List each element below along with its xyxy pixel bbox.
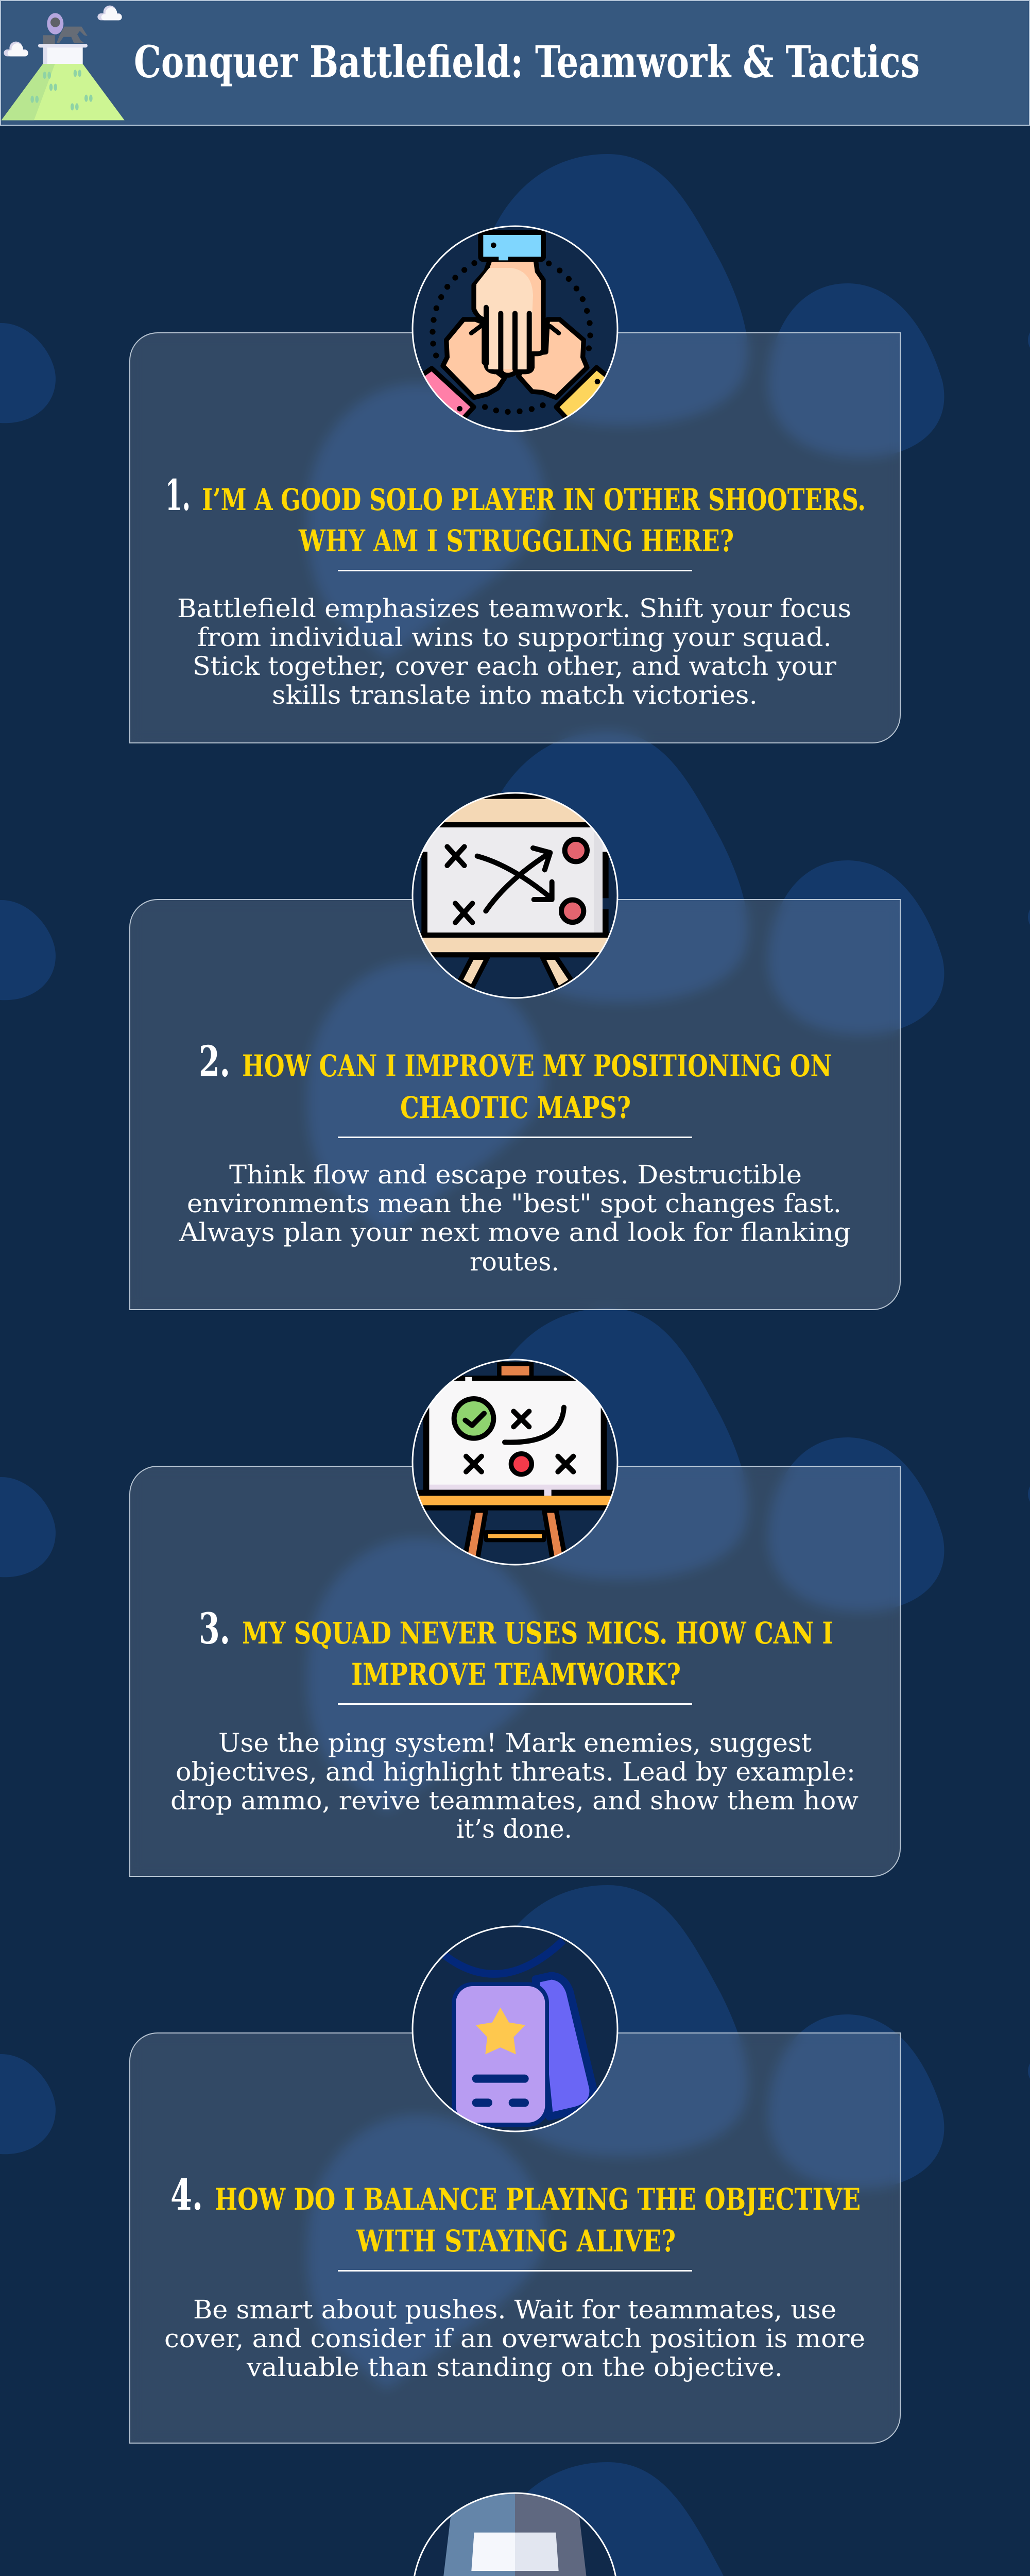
- panel: question 4: [129, 2032, 901, 2444]
- heading 2: [242, 1048, 832, 1125]
- body 2: routes.: [470, 1247, 559, 1277]
- icon: armored shield: [414, 2493, 616, 2576]
- body 4: cover, and consider if an overwatch position is more: [164, 2324, 865, 2353]
- number 2: 2.: [199, 1037, 230, 1087]
- body 1: [177, 594, 851, 710]
- question 4 text: [164, 2171, 865, 2382]
- body 3: objectives, and highlight threats. Lead by example:: [176, 1757, 855, 1787]
- panel: question 2: [129, 899, 901, 1310]
- body 2: Think flow and escape routes. Destructible: [229, 1160, 802, 1190]
- body 4: Be smart about pushes. Wait for teammates, use: [193, 2295, 836, 2325]
- icon: tactics board with arrows: [412, 792, 618, 998]
- body 3: Use the ping system! Mark enemies, suggest: [218, 1728, 812, 1758]
- heading 4: [215, 2182, 861, 2259]
- number 3: 3.: [199, 1604, 230, 1654]
- panel: question 1: [129, 332, 901, 743]
- icon: easel strategy board: [412, 1359, 618, 1565]
- body 1: Battlefield emphasizes teamwork. Shift your focus: [177, 594, 851, 623]
- icon: dog tag with star: [412, 1926, 618, 2132]
- header banner: [0, 0, 1030, 126]
- icon: three hands together: [412, 226, 618, 432]
- question 1 text: [165, 471, 866, 710]
- body 3: [170, 1728, 859, 1844]
- body 2: environments mean the "best" spot changes fast.: [187, 1189, 842, 1218]
- heading 3: IMPROVE TEAMWORK?: [351, 1657, 681, 1692]
- body 2: [179, 1160, 851, 1277]
- heading 4: WITH STAYING ALIVE?: [356, 2224, 676, 2259]
- body 2: Always plan your next move and look for flanking: [179, 1217, 851, 1247]
- question 2 text: [179, 1037, 851, 1277]
- body 1: Stick together, cover each other, and watch your: [193, 651, 836, 681]
- number 1: 1.: [165, 471, 191, 520]
- heading 1: [202, 482, 866, 558]
- heading 3: [242, 1616, 833, 1692]
- body 4: valuable than standing on the objective.: [246, 2352, 783, 2382]
- body 4: [164, 2295, 865, 2382]
- heading 2: CHAOTIC MAPS?: [400, 1090, 631, 1125]
- body 1: skills translate into match victories.: [272, 680, 758, 710]
- body 3: it’s done.: [456, 1814, 572, 1844]
- body 3: drop ammo, revive teammates, and show them how: [170, 1786, 859, 1816]
- question 3 text: [170, 1604, 859, 1844]
- heading 1: WHY AM I STRUGGLING HERE?: [298, 523, 734, 558]
- panel: question 3: [129, 1466, 901, 1877]
- number 4: 4.: [170, 2171, 203, 2220]
- body 1: from individual wins to supporting your squad.: [197, 622, 832, 652]
- icon: hill with tower: [1, 5, 125, 121]
